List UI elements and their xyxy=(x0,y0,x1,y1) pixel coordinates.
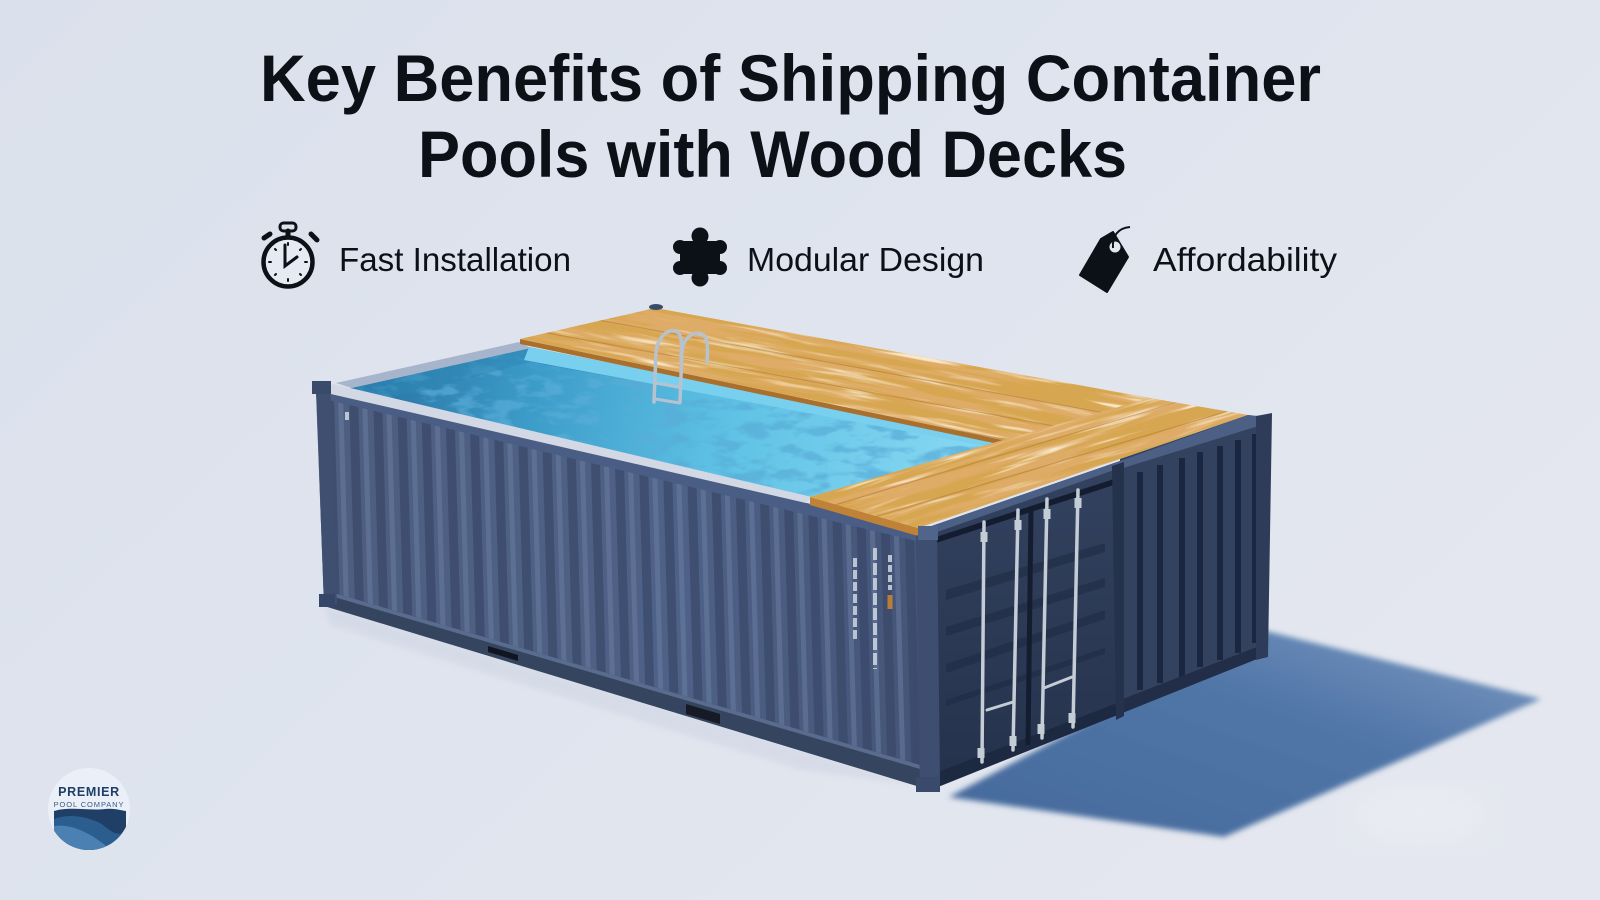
logo waves xyxy=(54,809,126,850)
logo wordmark: PREMIER xyxy=(58,785,120,799)
feature: modular design xyxy=(673,228,984,286)
container right side wall xyxy=(1120,415,1268,714)
container corner posts xyxy=(312,304,1272,792)
pool rim xyxy=(322,342,812,503)
logo: premier pool company xyxy=(48,768,130,850)
wood deck xyxy=(520,309,1248,536)
icon: price tag xyxy=(1080,227,1130,292)
logo: premier pool company: POOL COMPANY xyxy=(54,800,124,809)
container markings xyxy=(347,412,890,669)
label: fast installation: Fast Installation xyxy=(339,241,571,278)
title: Pools with Wood Decks xyxy=(418,117,1127,191)
icon: stopwatch xyxy=(264,223,317,286)
feature: fast installation xyxy=(264,223,571,286)
pool water xyxy=(350,347,993,497)
title xyxy=(260,41,1321,191)
cast shadow xyxy=(324,604,1541,843)
container long side wall xyxy=(316,382,923,787)
shipping container pool xyxy=(312,304,1272,792)
feature: affordability xyxy=(1080,227,1338,292)
icon: puzzle piece xyxy=(673,228,727,286)
label: affordability: Affordability xyxy=(1153,241,1338,278)
door locking rods xyxy=(981,490,1078,762)
title: Key Benefits of Shipping Container xyxy=(260,41,1321,115)
pool ladder xyxy=(654,331,707,403)
container door end xyxy=(920,461,1120,787)
label: modular design: Modular Design xyxy=(747,241,984,278)
